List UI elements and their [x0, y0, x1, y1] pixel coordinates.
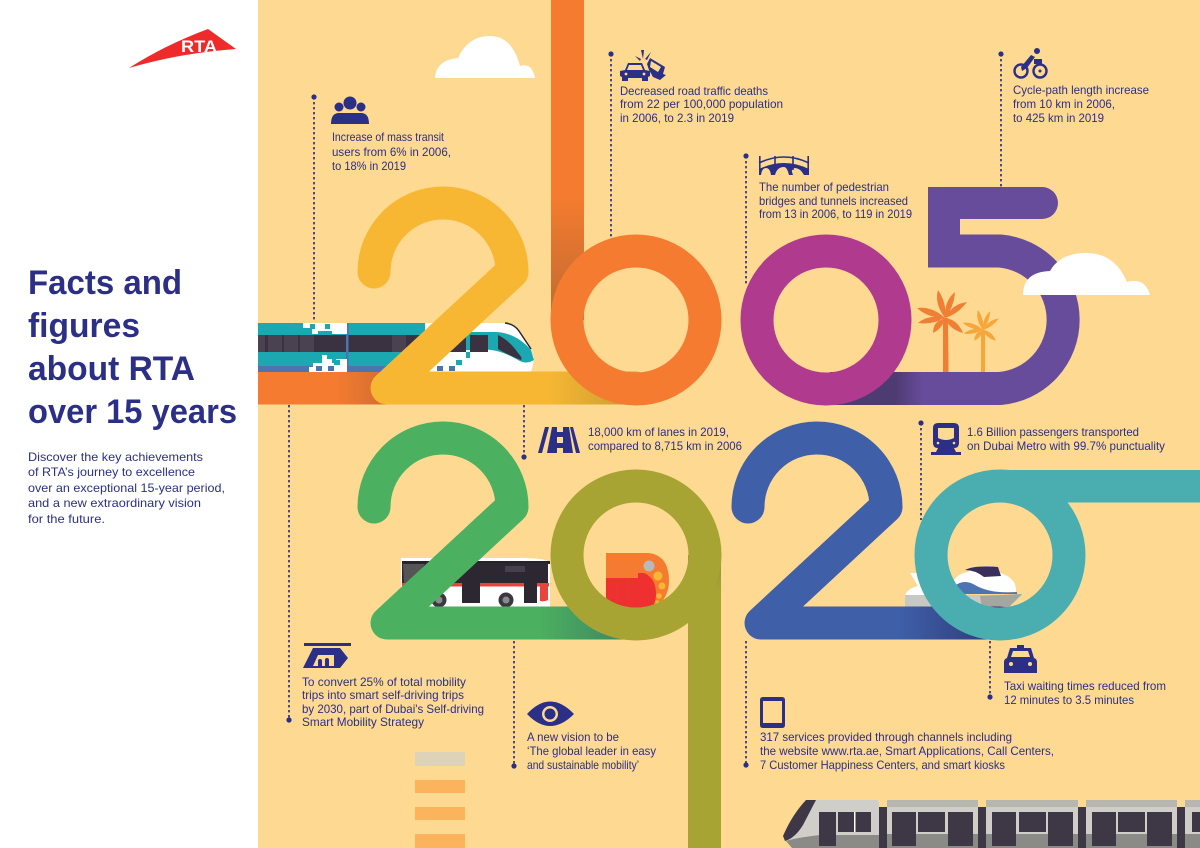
metro callout: on Dubai Metro with 99.7% punctuality — [967, 440, 1165, 453]
small palm — [963, 310, 999, 372]
digit 0 olive — [567, 486, 705, 624]
intro text — [28, 450, 225, 526]
metro callout — [918, 420, 1165, 455]
cycle path callout — [998, 48, 1149, 187]
D graphic inside circle — [606, 553, 669, 612]
icon: self-driving pod — [303, 643, 351, 668]
digit 5 purple — [830, 187, 1063, 405]
lanes callout — [521, 426, 742, 460]
cycle path callout: to 425 km in 2019 — [1013, 112, 1104, 125]
services callout: 317 services provided through channels including — [760, 731, 1012, 744]
taxi callout: 12 minutes to 3.5 minutes — [1004, 694, 1134, 707]
orange vertical bar — [551, 0, 584, 320]
dashed connectors — [289, 405, 990, 766]
palm trees — [917, 290, 999, 372]
taxi callout: Taxi waiting times reduced from — [1004, 680, 1166, 693]
digit 0 orange — [567, 251, 705, 389]
icon: car crash — [620, 50, 666, 81]
self-driving callout — [286, 643, 484, 729]
metro callout: 1.6 Billion passengers transported — [967, 426, 1139, 439]
intro text: for the future. — [28, 512, 105, 526]
pedestrian bridges callout: The number of pedestrian — [759, 181, 889, 194]
cloud top — [435, 36, 535, 78]
road deaths callout: Decreased road traffic deaths — [620, 85, 768, 98]
cycle path callout: Cycle-path length increase — [1013, 84, 1149, 97]
pedestrian bridges callout — [743, 153, 912, 285]
icon: metro train — [931, 423, 961, 455]
road stripes — [415, 752, 465, 848]
intro text: of RTA’s journey to excellence — [28, 465, 195, 479]
title: about RTA — [28, 350, 195, 388]
self-driving callout: Smart Mobility Strategy — [302, 716, 424, 729]
icon: cyclist — [1014, 48, 1046, 78]
icon: eye — [527, 702, 574, 726]
sidebar panel — [0, 0, 258, 848]
teal line — [1000, 470, 1200, 502]
digit 0 teal — [931, 486, 1069, 624]
orange bar left — [258, 372, 390, 404]
intro text: over an exceptional 15-year period, — [28, 481, 225, 495]
icon: taxi — [1004, 645, 1037, 673]
title — [28, 264, 237, 431]
vision callout: ‘The global leader in easy — [527, 745, 656, 758]
self-driving callout: trips into smart self-driving trips — [302, 689, 464, 702]
RTA logo — [129, 29, 236, 68]
intro text: Discover the key achievements — [28, 450, 203, 464]
metro train bottom — [783, 800, 1200, 848]
vision callout: and sustainable mobility’ — [527, 759, 639, 772]
mass transit callout: users from 6% in 2006, — [332, 146, 451, 159]
taxi callout — [987, 645, 1166, 707]
title: Facts and — [28, 264, 182, 302]
self-driving callout: To convert 25% of total mobility — [302, 676, 466, 689]
icon: people — [331, 96, 369, 124]
services callout: 7 Customer Happiness Centers, and smart kiosks — [760, 759, 1005, 772]
ship — [905, 566, 1022, 608]
mass transit callout: to 18% in 2019 — [332, 160, 406, 173]
pedestrian bridges callout: bridges and tunnels increased — [759, 195, 908, 208]
digit 2 blue — [748, 438, 1000, 623]
digit 0 magenta — [757, 251, 895, 389]
bus — [401, 558, 550, 608]
olive tail — [688, 555, 721, 848]
road deaths callout: in 2006, to 2.3 in 2019 — [620, 112, 734, 125]
lanes callout: 18,000 km of lanes in 2019, — [588, 426, 729, 439]
cycle path callout: from 10 km in 2006, — [1013, 98, 1115, 111]
vision callout: A new vision to be — [527, 731, 619, 744]
services callout: the website www.rta.ae, Smart Applications, Call Centers, — [760, 745, 1054, 758]
mass transit callout — [311, 94, 451, 322]
intro text: and a new extraordinary vision — [28, 496, 201, 510]
large palm — [917, 290, 967, 372]
title: figures — [28, 307, 140, 345]
cloud right — [1023, 253, 1150, 295]
icon: road — [538, 427, 580, 453]
RTA logo: RTA — [181, 37, 217, 56]
road deaths callout — [608, 50, 783, 237]
title: over 15 years — [28, 393, 237, 431]
road deaths callout: from 22 per 100,000 population — [620, 98, 783, 111]
icon: tablet — [760, 697, 785, 728]
mass transit callout: Increase of mass transit — [332, 131, 445, 144]
lanes callout: compared to 8,715 km in 2006 — [588, 440, 742, 453]
tram behind 2005 — [258, 323, 534, 372]
icon: bridge — [759, 156, 809, 175]
background panel — [258, 0, 1200, 848]
digit 2 green — [374, 438, 636, 623]
vision callout — [511, 702, 656, 772]
digit 2 yellow — [374, 203, 636, 388]
self-driving callout: by 2030, part of Dubai's Self-driving — [302, 703, 484, 716]
pedestrian bridges callout: from 13 in 2006, to 119 in 2019 — [759, 208, 912, 221]
services callout — [743, 697, 1054, 772]
